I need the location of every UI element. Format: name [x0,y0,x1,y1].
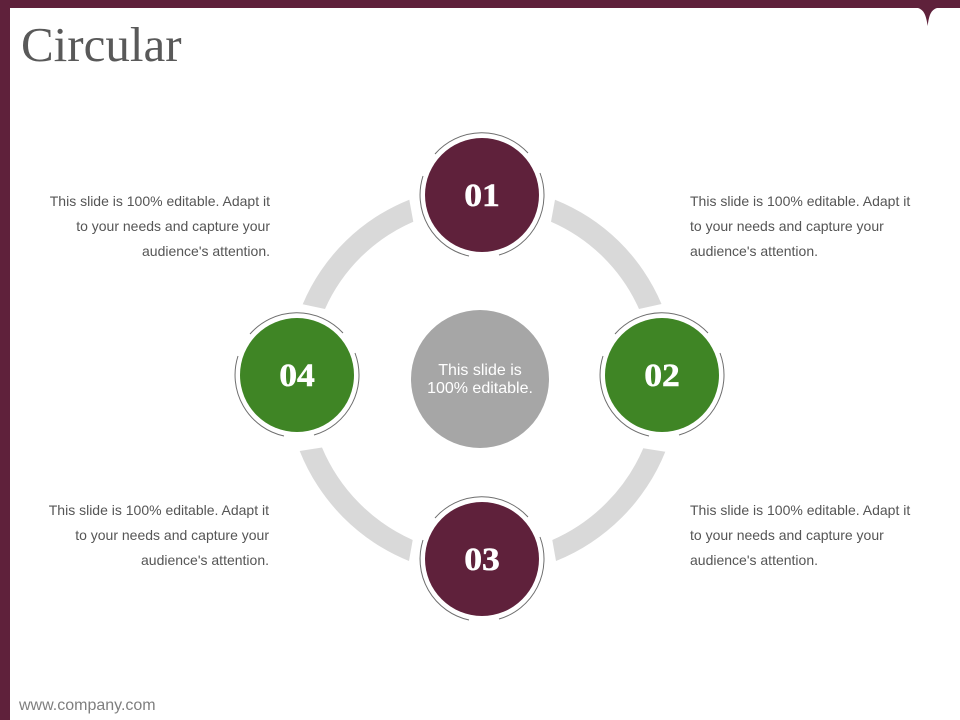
node 01: 01 [464,177,500,214]
text block: bottom right [690,502,910,568]
node 03 [420,497,544,620]
node 02: 02 [644,357,680,394]
center circle: This slide is [438,362,522,379]
text block: bottom left: audience's attention. [141,552,269,568]
node 04 [235,313,359,436]
connector arcs [300,200,665,561]
text block: bottom right: This slide is 100% editable. Adapt it [690,502,910,518]
text block: top right [690,193,910,259]
text block: bottom left: to your needs and capture your [75,527,269,543]
node 02 [600,313,724,436]
text block: top left: audience's attention. [142,243,270,259]
footer url: www.company.com [19,697,156,714]
text block: top right: to your needs and capture your [690,218,884,234]
text block: bottom left [49,502,269,568]
text block: bottom right: audience's attention. [690,552,818,568]
node 03: 03 [464,541,500,578]
center circle: 100% editable. [427,380,533,397]
text block: top left: This slide is 100% editable. Adapt it [50,193,270,209]
icon: top-right notch [918,8,937,26]
text block: top left [50,193,270,259]
text block: top right: This slide is 100% editable. Adapt it [690,193,910,209]
title: Circular [21,17,182,72]
frame: top bar [0,0,960,8]
text block: bottom right: to your needs and capture your [690,527,884,543]
center circle [411,310,549,448]
frame: left bar [0,0,10,720]
node 04: 04 [279,357,315,394]
text block: bottom left: This slide is 100% editable. Adapt it [49,502,269,518]
text block: top left: to your needs and capture your [76,218,270,234]
text block: top right: audience's attention. [690,243,818,259]
node 01 [420,133,544,256]
